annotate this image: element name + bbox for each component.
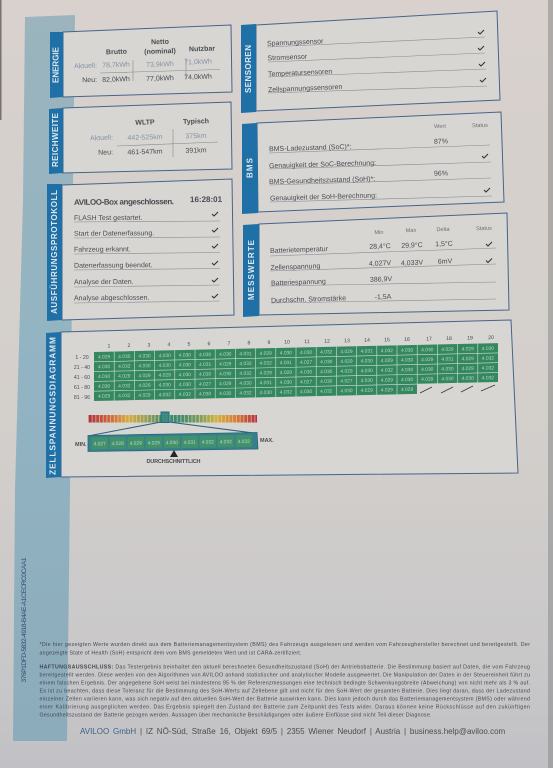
- column numbers: 1: [108, 343, 111, 350]
- panel: Energie: 71,0kWh: [184, 59, 212, 66]
- footnote text: Gesundheitszustand der Batterie gezogen werden. Aussagen über mechanische Beschädigungen oder äußere Einflüsse sind nicht Teil dieser Diagnose.: [40, 712, 431, 718]
- column numbers: 15: [384, 337, 390, 343]
- panel: Reichweite: WLTP: [135, 119, 155, 127]
- cell values: 4.029: [381, 387, 393, 393]
- cell values: 4.029: [260, 351, 272, 357]
- panel: Reichweite: Neu:: [98, 149, 113, 157]
- cell values: 4.032: [482, 375, 494, 381]
- cell values: 4.029: [98, 354, 110, 361]
- column numbers: 2: [128, 343, 131, 349]
- cell values: 4.027: [300, 360, 312, 366]
- panel: Messwerte: 1,5°C: [435, 240, 453, 248]
- cell values: 4.030: [98, 364, 110, 370]
- cell values: 4.032: [239, 371, 252, 377]
- cell values: 4.032: [159, 392, 171, 398]
- cell values: 4.030: [401, 357, 413, 364]
- row labels: 21 - 40: [74, 365, 90, 371]
- panel: Sensoren: Temperatursensoren: [268, 69, 332, 78]
- cell values: 4.029: [118, 373, 131, 380]
- cell values: 4.029: [98, 393, 110, 400]
- cell values: 4.029: [381, 358, 393, 364]
- panel: Ausführungsprotokoll: [47, 179, 234, 321]
- footnote text: bereitgestellt werden. Diese werden von den Algorithmen von AVILOO anhand statistischer und analytischer Modelle ausgewertet. Die Manipulation der Daten in der Steuereinheit führt zu: [40, 672, 530, 678]
- cell values: 4.030: [280, 350, 292, 357]
- panel: Energie: (nominal): [144, 48, 176, 56]
- panel: Messwerte: Delta: [436, 227, 451, 233]
- panel: Messwerte: Min: [374, 230, 384, 236]
- MAX label: MAX.: [260, 438, 274, 444]
- panel: Ausführungsprotokoll: Datenerfassung beendet.: [74, 262, 153, 270]
- min to max cell band: 4.030: [166, 440, 178, 446]
- panel: Reichweite: [49, 102, 232, 174]
- cell values: 4.032: [381, 368, 393, 374]
- cell values: 4.030: [159, 382, 171, 389]
- panel: Messwerte: Batteriespannung: [271, 279, 326, 287]
- footer contact line: AVILOO GmbH | IZ NÖ-Süd, Straße 16, Objekt 69/5 | 2355 Wiener Neudorf | Austria | business.help@aviloo.com: [80, 727, 506, 736]
- cell values: 4.029: [401, 387, 413, 393]
- panel: BMS: BMS-Ladezustand (SoC)*:: [269, 144, 352, 153]
- footnote text: [40, 642, 530, 718]
- cell values: 4.029: [260, 370, 272, 377]
- panel: Messwerte: [243, 213, 509, 317]
- footnote text: einzelner Zellen variieren kann, was sich negativ auf den aktuellen SoH-Wert der Batterie auswirken kann. Dies kann jedoch durch das Batteriemanagementsystem (BMS) oder während: [40, 696, 530, 702]
- cell values: 4.032: [381, 348, 393, 354]
- heading: BMS: BMS: [246, 157, 254, 178]
- panel: Messwerte: 4,033V: [401, 260, 424, 267]
- cell values: 4.030: [462, 376, 474, 382]
- panel: Messwerte: 28,4°C: [369, 242, 391, 251]
- MIN label: MIN.: [75, 442, 87, 448]
- cell values: 4.030: [199, 391, 211, 397]
- panel: Energie: Aktuell:: [74, 63, 97, 70]
- heading: Sensoren: SENSOREN: [244, 45, 253, 93]
- panel: Reichweite: Aktuell:: [90, 135, 113, 142]
- cell values: 4.029: [361, 388, 373, 394]
- row labels: [74, 355, 90, 401]
- cell values: 4.029: [219, 361, 232, 368]
- zoom connector: [88, 422, 257, 436]
- column numbers: 17: [426, 336, 432, 342]
- cell values: 4.030: [361, 368, 373, 374]
- panel: Sensoren: Zellspannungssensoren: [268, 84, 343, 94]
- heading: Energie: ENERGIE: [52, 46, 60, 83]
- cell values: 4.030: [138, 353, 151, 360]
- cell values: 4.032: [118, 393, 131, 399]
- cell values: 4.029: [219, 381, 232, 387]
- panel: Messwerte: 6mV: [438, 258, 453, 266]
- cell values: 4.030: [179, 382, 191, 388]
- cell values: 4.032: [239, 390, 252, 397]
- cell values: 4.030: [118, 354, 131, 360]
- panel: Ausführungsprotokoll: Start der Datenerfassung.: [74, 230, 154, 238]
- cell values: 4.030: [219, 391, 232, 397]
- panel: Messwerte: 386,9V: [370, 276, 393, 284]
- min to max cell band: 4.032: [220, 439, 232, 445]
- cell values: 4.030: [421, 367, 434, 373]
- cell values: 4.029: [340, 349, 353, 355]
- panel: Ausführungsprotokoll: AVILOO-Box angeschlossen.: [74, 197, 174, 207]
- empty cell slashes: [420, 385, 495, 393]
- panel: Sensoren: Spannungssensor: [267, 38, 324, 48]
- cell values: 4.030: [421, 347, 434, 353]
- cell values: 4.032: [118, 383, 131, 389]
- cell values: 4.032: [239, 361, 252, 367]
- cell values: 4.031: [260, 380, 272, 386]
- panel: BMS: 96%: [434, 170, 448, 178]
- cell values: 4.031: [199, 362, 211, 368]
- cell values: 4.030: [199, 372, 211, 378]
- cell values: 4.027: [199, 381, 211, 388]
- panel: Messwerte: Max: [406, 228, 417, 234]
- cell values: 4.029: [340, 369, 353, 375]
- average marker: [170, 450, 178, 457]
- min to max cell band: 4.029: [148, 440, 160, 447]
- cell values: 4.029: [159, 373, 171, 379]
- cell values: 4.029: [138, 383, 151, 389]
- min to max cell band: 4.028: [112, 441, 124, 447]
- cell values: 4.029: [381, 377, 393, 384]
- column numbers: 5: [188, 342, 191, 348]
- cell values: 4.030: [340, 388, 353, 394]
- cell values: 4.029: [462, 356, 474, 362]
- panel: BMS: Genauigkeit der SoH-Berechnung:: [270, 192, 377, 203]
- status checkmarks: [212, 212, 218, 298]
- cell values: 4.027: [340, 378, 353, 385]
- cell values: 4.032: [320, 349, 333, 356]
- min to max cell band: 4.027: [94, 441, 106, 447]
- panel: Energie: Brutto: [106, 49, 127, 56]
- cell values: 4.032: [482, 365, 494, 372]
- column numbers: 4: [168, 342, 171, 348]
- cell values: 4.030: [179, 372, 191, 378]
- column numbers: 19: [467, 335, 473, 342]
- vertical document code: 376P1DFD-5832-4918-B4AE-A1CECRC0CAA1: [21, 557, 28, 682]
- panel: BMS: BMS-Gesundheitszustand (SoH)*:: [269, 176, 375, 186]
- footnote text: HAFTUNGSAUSSCHLUSS: Das Testergebnis beinhaltet den aktuell berechneten Gesundheitszustand (SoH) der Antriebsbatterie. Die Bestimmung basiert auf Daten, die vom Fahrzeug: [40, 664, 530, 670]
- panel: BMS: Status: [472, 123, 488, 129]
- column numbers: 12: [324, 339, 330, 345]
- cell values: 4.029: [421, 357, 434, 363]
- cell values: 4.030: [219, 371, 232, 377]
- cell values: 4.029: [280, 370, 292, 376]
- footnote text: einem falschen Ergebnis. Der angegebene SoH weist bei mindestens 95 % der Referenzmessungen eine technisch bedingte Schwenkungsbreite (Abweichung) von nicht mehr als 3 % auf.: [40, 680, 530, 686]
- cell values: 4.030: [320, 359, 333, 365]
- column numbers: 14: [364, 338, 370, 344]
- cell values: 4.030: [98, 374, 110, 380]
- min to max cell band: 4.031: [184, 440, 196, 446]
- cell values: 4.030: [441, 366, 454, 373]
- sensor checkmarks: [478, 30, 486, 82]
- cell values: 4.030: [179, 352, 191, 359]
- cell values: 4.030: [159, 363, 171, 369]
- panel: Reichweite: 391km: [185, 147, 207, 155]
- cell values: 4.032: [482, 356, 494, 362]
- cell values: 4.030: [260, 390, 272, 396]
- row labels: 1 - 20: [75, 355, 89, 361]
- heading: Zellspannungsdiagramm: ZELLSPANNUNGSDIAGRAMM: [48, 337, 58, 475]
- cell values: 4.030: [179, 362, 191, 369]
- panel: Energie: [50, 25, 232, 98]
- cell values: 4.029: [441, 347, 454, 353]
- cell values: 4.029: [340, 359, 353, 365]
- column numbers: 16: [404, 337, 410, 343]
- panel: Messwerte: Zellenspannung: [270, 263, 321, 272]
- panel: Energie: Netto: [151, 39, 169, 46]
- panel: Zellspannungsdiagramm: [46, 320, 518, 478]
- column numbers: 7: [228, 341, 231, 347]
- min to max cell band: [88, 432, 258, 452]
- cell values: 4.029: [421, 377, 434, 383]
- cell values: 4.027: [300, 379, 312, 385]
- heading: Ausführungsprotokoll: AUSFÜHRUNGSPROTOKOLL: [50, 190, 59, 314]
- panel: Ausführungsprotokoll: Fahrzeug erkannt.: [74, 246, 131, 254]
- cell values: 4.030: [219, 352, 232, 358]
- footnote text: *Die hier gezeigten Werte wurden direkt aus dem Batteriemanagementsystem (BMS) des Fahrzeugs ausgelesen und werden vom Fahrzeughersteller berechnet und bereitgestellt. Der: [40, 642, 530, 648]
- cell values: 4.030: [98, 384, 110, 390]
- panel: Energie: 73,9kWh: [146, 61, 174, 69]
- cell values: 4.030: [361, 378, 373, 384]
- panel: Energie: 77,0kWh: [146, 75, 174, 83]
- panel: Messwerte: Durchschn. Stromstärke: [271, 295, 346, 305]
- panel: Reichweite: 375km: [185, 133, 207, 140]
- cell values: 4.030: [401, 377, 413, 383]
- cell values: 4.029: [462, 346, 474, 353]
- cell voltage heat grid: [94, 335, 498, 401]
- panel: Sensoren: Stromsensor: [267, 54, 308, 62]
- column numbers: 11: [304, 339, 310, 345]
- heading: Reichweite: REICHWEITE: [51, 112, 60, 167]
- panel: Reichweite: 461-547km: [127, 148, 163, 157]
- row labels: 61 - 80: [74, 385, 90, 391]
- cell values: 4.030: [138, 363, 151, 369]
- panel: Messwerte: Batterietemperatur: [270, 246, 329, 255]
- BMS checkmarks: [482, 154, 490, 192]
- cell values: 4.032: [320, 389, 333, 395]
- cell values: 4.031: [280, 360, 292, 366]
- cell values: 4.030: [361, 358, 373, 365]
- panel: Ausführungsprotokoll: Analyse der Daten.: [74, 279, 134, 286]
- cell values: 4.030: [239, 381, 252, 387]
- column numbers: 3: [148, 343, 151, 349]
- cell values: 4.030: [401, 367, 413, 373]
- panel: Sensoren: [241, 11, 500, 113]
- panel: Messwerte: Status: [476, 226, 492, 232]
- min to max cell band: 4.032: [238, 439, 250, 445]
- cell values: 4.030: [482, 346, 494, 352]
- footnote text: einer Kalibrierung ausgeglichen werden. Das Ergebnis spiegelt den Zustand der Batterie zum Zeitpunkt des Tests wider. Daraus können keine Rückschlüsse auf den zukünftigen: [40, 704, 530, 710]
- cell values: 4.032: [260, 360, 272, 367]
- column numbers: [108, 335, 494, 350]
- panel: Reichweite: 442-525km: [127, 134, 163, 142]
- panel: BMS: Wert: [434, 124, 446, 130]
- panel: Messwerte: 29,9°C: [401, 241, 423, 250]
- cell values: 4.030: [300, 350, 312, 356]
- cell values: 4.030: [199, 352, 211, 358]
- row labels: 41 - 60: [74, 375, 90, 381]
- heading: Messwerte: MESSWERTE: [247, 239, 256, 300]
- cell values: 4.030: [300, 369, 312, 376]
- cell values: 4.032: [280, 389, 292, 396]
- cell values: 4.030: [300, 389, 312, 395]
- column numbers: 18: [446, 336, 452, 342]
- panel: Ausführungsprotokoll: 16:28:01: [190, 195, 223, 204]
- panel: Energie: 82,0kWh: [102, 76, 130, 84]
- column numbers: 8: [248, 340, 251, 346]
- cell values: 4.030: [441, 376, 454, 382]
- cell values: 4.031: [239, 351, 252, 357]
- column numbers: 13: [344, 338, 350, 344]
- column numbers: 20: [488, 335, 494, 341]
- cell values: 4.030: [401, 348, 413, 354]
- cell values: 4.032: [179, 392, 191, 398]
- panel: Messwerte: 4,027V: [369, 260, 392, 268]
- panel: BMS: [242, 112, 504, 214]
- column numbers: 6: [208, 341, 211, 347]
- cell values: 4.030: [159, 353, 171, 359]
- cell values: 4.029: [138, 373, 151, 379]
- panel: BMS: Genauigkeit der SoC-Berechnung:: [269, 160, 376, 170]
- panel: Energie: Nutzbar: [189, 46, 215, 53]
- min to max cell band: 4.029: [130, 441, 142, 447]
- panel: Messwerte: -1,5A: [375, 294, 392, 301]
- cell values: [98, 346, 494, 400]
- cell values: 4.029: [138, 393, 151, 399]
- cell values: 4.030: [280, 380, 292, 386]
- cell values: 4.029: [462, 366, 474, 372]
- cell values: 4.031: [361, 348, 373, 355]
- footnote text: angezeigte State of Health (SoH) entspricht dem vom BMS gemeldeten Wert und ist CARA-zertifiziert.: [40, 650, 302, 656]
- cell values: 4.031: [441, 356, 454, 363]
- blue side strip: [13, 15, 75, 741]
- column numbers: 10: [284, 339, 290, 346]
- column numbers: 9: [268, 340, 271, 346]
- cell values: 4.032: [118, 364, 131, 370]
- average label: DURCHSCHNITTLICH: [146, 459, 201, 465]
- panel: BMS: 87%: [434, 138, 448, 146]
- footnote text: Es ist zu beachten, dass diese Toleranz für die Bestimmung des SoH-Werts auf Zellebene gilt und nicht für den SoH-Wert der gesamten Batterie. Dies liegt daran, dass der Ladezustand: [40, 688, 530, 694]
- Messwerte checkmarks: [486, 242, 492, 262]
- cell values: 4.030: [320, 379, 333, 385]
- panel: Ausführungsprotokoll: FLASH Test gestartet.: [74, 215, 142, 222]
- cell values: 4.030: [320, 369, 333, 375]
- panel: Reichweite: Typisch: [183, 118, 209, 126]
- min to max cell band: 4.032: [202, 439, 214, 446]
- panel: Ausführungsprotokoll: Analyse abgeschlossen.: [74, 295, 150, 302]
- colour scale bar: [88, 412, 257, 422]
- row labels: 81 - 96: [74, 395, 90, 401]
- panel: Energie: 78,7kWh: [102, 62, 130, 69]
- panel: Energie: Neu:: [82, 77, 97, 84]
- panel: Energie: 74,0kWh: [184, 74, 212, 81]
